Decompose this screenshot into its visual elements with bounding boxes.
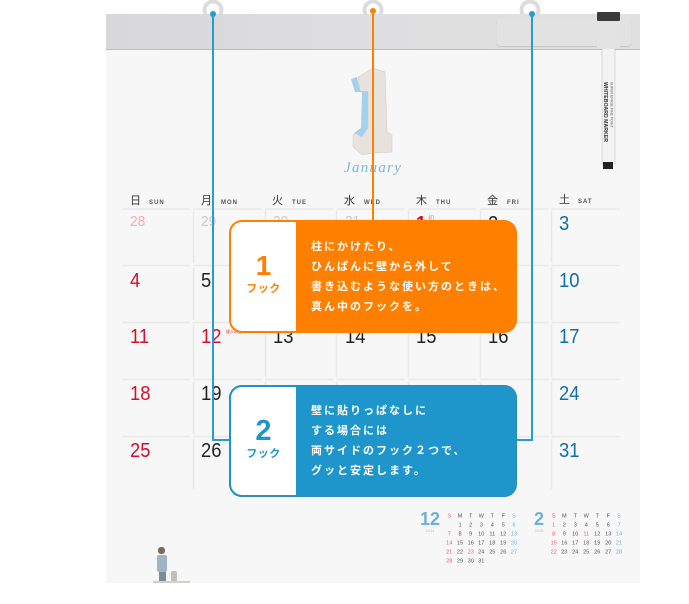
hook count label: two: 2 — [255, 415, 272, 447]
mini calendar: December: 15 — [457, 540, 463, 546]
mini calendar: December: S — [447, 514, 451, 520]
mini calendar: December: 12 — [500, 532, 506, 538]
mini calendar: December: 2 — [469, 522, 472, 528]
marker tray — [497, 18, 631, 46]
mini calendar: February: 1 — [552, 522, 555, 528]
callout: one hook — [229, 220, 517, 333]
calendar grid and dates: 11 — [130, 326, 149, 348]
mini calendar: February: 14 — [616, 532, 622, 538]
mini calendar: December: 9 — [469, 532, 472, 538]
mini calendar: December: 27 — [511, 550, 517, 556]
mini calendar: December: 20 — [511, 540, 517, 546]
mini calendar: February: 8 — [552, 532, 555, 538]
mini calendar: February: 15 — [551, 540, 557, 546]
weekday header: 土 — [559, 194, 570, 206]
weekday header: SAT — [578, 199, 593, 205]
calendar grid and dates: 19 — [201, 383, 221, 405]
mini calendar: December: 8 — [458, 532, 462, 538]
mini calendar: December — [420, 509, 517, 564]
mini calendar: February: 22 — [551, 550, 557, 556]
callout text: two hooks: する場合には — [311, 425, 389, 437]
mini calendar: February: 27 — [605, 550, 611, 556]
mini calendar: February — [534, 509, 622, 556]
calendar grid and dates: 3 — [559, 213, 569, 235]
mini calendar: December: 10 — [478, 532, 484, 538]
mini calendar: February: 11 — [583, 532, 589, 538]
mini calendar: February: 24 — [572, 550, 578, 556]
calendar grid and dates: 30 — [273, 213, 288, 230]
calendar grid and dates: 29 — [201, 213, 216, 230]
mini calendar: February: W — [584, 514, 590, 520]
callout text: one hook: 柱にかけたり、 — [311, 241, 402, 253]
calendar grid and dates: 初 — [428, 216, 434, 222]
weekday header: FRI — [507, 200, 520, 206]
weekday header: TUE — [292, 200, 307, 206]
weekday header: 日 — [130, 195, 141, 207]
calendar grid and dates: 4 — [130, 270, 140, 292]
mini calendar: December: 23 — [468, 550, 474, 556]
mini calendar: December: 24 — [478, 550, 484, 556]
calendar grid and dates: 18 — [130, 383, 150, 405]
callout text: two hooks: 両サイドのフック２つで、 — [311, 445, 467, 457]
weekday header: MON — [221, 200, 238, 206]
mini calendar: December: 3 — [480, 522, 483, 528]
mini calendar: December: 5 — [502, 522, 505, 528]
mini calendar: December: 26 — [500, 550, 506, 556]
mini calendar: February: T — [596, 514, 600, 520]
callout text: two hooks: 壁に貼りっぱなしに — [311, 405, 428, 417]
mini calendar: December: F — [502, 514, 506, 520]
weekday header: 火 — [272, 195, 283, 207]
mini calendar: February: 19 — [594, 540, 600, 546]
weekday header — [130, 194, 593, 207]
calendar grid and dates: 2 — [488, 213, 498, 235]
mini calendar: February: 2015 — [535, 528, 544, 533]
mini calendar: December: 7 — [448, 532, 451, 538]
callout text: two hooks: グッと安定します。 — [311, 465, 427, 477]
marker: WHITEBOARD MARKER — [602, 82, 608, 142]
mini calendar: February: F — [607, 514, 611, 520]
mini calendar: December: 28 — [446, 558, 452, 564]
mini calendar: December: 2014 — [426, 528, 435, 533]
callout text: one hook — [311, 240, 506, 313]
blue hook lines — [210, 11, 535, 441]
hook count label: one: フック — [246, 283, 281, 295]
mini calendar: December: 25 — [489, 550, 495, 556]
calendar grid and dates: 14 — [345, 326, 365, 348]
figure illustration: person and dog — [153, 547, 190, 583]
calendar grid and dates: 5 — [201, 270, 211, 292]
mini calendar: February: 2 — [563, 522, 566, 528]
hook count label: one — [231, 222, 296, 331]
mini calendar: February: 4 — [585, 522, 588, 528]
mini calendar: February: 10 — [572, 532, 578, 538]
mini calendar: December: 22 — [457, 550, 463, 556]
calendar grid and dates: 1 — [416, 213, 426, 235]
calendar grid and dates: 25 — [130, 440, 150, 462]
mini calendar: December: M — [458, 514, 463, 520]
calendar grid and dates: 15 — [416, 326, 436, 348]
hook count label: two: フック — [246, 448, 281, 460]
month name: January — [344, 160, 402, 176]
mini calendar: February: 5 — [596, 522, 599, 528]
mini calendar: February: 7 — [617, 522, 621, 528]
hook rings — [202, 0, 540, 14]
mini calendar: December: 31 — [478, 558, 484, 564]
mini calendar: February: T — [574, 514, 578, 520]
calendar grid and dates: 17 — [559, 326, 579, 348]
weekday header: 木 — [416, 195, 427, 207]
mini calendar: February: 3 — [574, 522, 577, 528]
mini calendar: December: 11 — [489, 532, 495, 538]
callout text: one hook: 書き込むような使い方のときは、 — [311, 281, 506, 293]
mini calendar: February: 23 — [561, 550, 567, 556]
mini calendar: December: 1 — [458, 522, 462, 528]
mini calendar: December: T — [491, 514, 495, 520]
calendar grid and dates: 31 — [559, 440, 579, 462]
mini calendar: December: 19 — [500, 540, 506, 546]
callout: two hooks — [229, 385, 517, 497]
calendar grid and dates: 成人の日 — [226, 329, 242, 334]
weekday header: THU — [436, 200, 451, 206]
weekday header: 水 — [344, 195, 355, 207]
mini calendar: December: 16 — [468, 540, 474, 546]
calendar grid and dates: 12 — [201, 326, 221, 348]
mini calendar: February: 20 — [605, 540, 611, 546]
mini calendar: December: 4 — [491, 522, 494, 528]
mini calendar: December: 14 — [446, 540, 452, 546]
callout text: one hook: ひんぱんに壁から外して — [311, 261, 454, 273]
calendar grid and dates: 13 — [273, 326, 293, 348]
mini calendar: February: S — [552, 514, 556, 520]
mini calendar: December: S — [512, 514, 516, 520]
mini calendar: December: T — [469, 514, 473, 520]
marker: SUPER ERASE FINE POINT — [610, 82, 614, 128]
mini calendar: February: 21 — [616, 540, 622, 546]
mini calendar: December: 30 — [468, 558, 474, 564]
hanging bar — [106, 14, 640, 50]
callout text: one hook: 真ん中のフックを。 — [311, 301, 428, 313]
mini calendar: February: 25 — [583, 550, 589, 556]
mini calendar: December: W — [479, 514, 485, 520]
callout text: two hooks — [311, 404, 467, 477]
mini calendar: February: 2 — [534, 509, 544, 529]
mini calendar: December: 13 — [511, 532, 517, 538]
orange hook line — [370, 8, 376, 220]
mini calendar: February: 17 — [572, 540, 578, 546]
calendar grid and dates: 10 — [559, 270, 579, 292]
weekday header: 金 — [487, 195, 498, 207]
mini calendar: December: 6 — [512, 522, 516, 528]
mini calendar: February: M — [562, 514, 567, 520]
hook count label: two — [231, 387, 296, 495]
mini calendar: December: 29 — [457, 558, 463, 564]
mini calendar: December: 17 — [478, 540, 484, 546]
big numeral 1 — [351, 68, 392, 156]
mini calendar: December: 18 — [489, 540, 495, 546]
mini calendar: February: 13 — [605, 532, 611, 538]
calendar grid and dates: 24 — [559, 383, 579, 405]
mini calendar: February: S — [617, 514, 621, 520]
mini calendar: February: 16 — [561, 540, 567, 546]
weekday header: WED — [364, 200, 381, 206]
calendar grid and dates: 31 — [345, 213, 360, 230]
mini calendar: February: 28 — [616, 550, 622, 556]
hook count label: one: 1 — [256, 250, 271, 281]
mini calendar: February: 26 — [594, 550, 600, 556]
mini calendar: February: 18 — [583, 540, 589, 546]
marker — [597, 12, 620, 169]
weekday header: SUN — [149, 200, 165, 206]
calendar grid and dates: 26 — [201, 440, 221, 462]
calendar grid and dates: 28 — [130, 213, 145, 230]
mini calendar: December: 12 — [420, 509, 440, 529]
mini calendar: February: 9 — [563, 532, 566, 538]
mini calendar: December: 21 — [446, 550, 452, 556]
calendar paper — [106, 50, 640, 583]
weekday header: 月 — [201, 195, 212, 207]
calendar grid and dates: 16 — [488, 326, 508, 348]
mini calendar: February: 12 — [594, 532, 600, 538]
mini calendar: February: 6 — [607, 522, 610, 528]
